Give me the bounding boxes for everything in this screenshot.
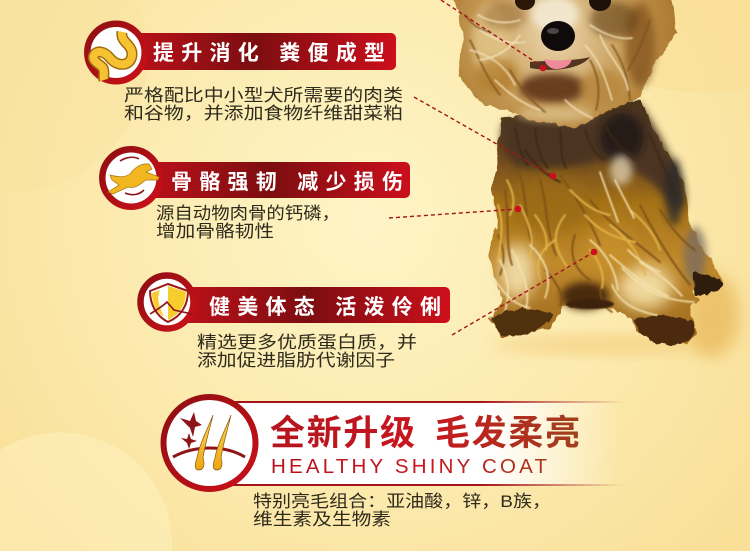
icon: running dog [102, 149, 160, 207]
subheading: HEALTHY SHINY COAT [271, 455, 547, 478]
head fur strands [465, 15, 650, 118]
feature 4: healthy shiny coat [164, 397, 625, 529]
dog head [453, 0, 677, 127]
body text [197, 333, 417, 370]
body text [253, 492, 551, 529]
feature 3: body shape [140, 276, 450, 370]
white band [210, 401, 625, 486]
hind paw [693, 273, 722, 296]
body text: 源自动物肉骨的钙磷， [156, 204, 340, 223]
dark neck fur [501, 104, 685, 209]
banner [112, 33, 396, 70]
body text: 维生素及生物素 [253, 510, 391, 529]
body text: 严格配比中小型犬所需要的肉类 [124, 86, 403, 105]
dog body [488, 100, 722, 345]
heading: 毛发柔亮 [435, 414, 580, 453]
body text: 精选更多优质蛋白质，并 [197, 333, 417, 352]
body text: 和谷物，并添加食物纤维甜菜粕 [124, 104, 403, 123]
body text: 特别亮毛组合：亚油酸，锌，B族， [253, 492, 551, 511]
icon: hair follicles [164, 397, 256, 489]
icon: stomach [87, 24, 145, 81]
eyes [515, 0, 535, 10]
callout lines and dots [389, 0, 597, 335]
chest fur [508, 177, 592, 233]
body text [156, 204, 340, 241]
banner [165, 287, 450, 323]
heading: 骨骼强韧 减少损伤 [171, 171, 403, 194]
fur strands [495, 125, 695, 316]
dog photo [453, 0, 722, 345]
front paw right [634, 316, 693, 345]
front paw left [491, 310, 553, 337]
body text: 增加骨骼韧性 [156, 222, 274, 241]
heading: 全新升级 [270, 414, 415, 453]
head shading [625, 3, 655, 87]
feature 2: bones [102, 149, 410, 241]
icon: shield [140, 276, 194, 328]
nose [541, 21, 575, 51]
body text [124, 86, 403, 123]
body text: 添加促进脂肪代谢因子 [197, 351, 395, 370]
feature 1: digestion [87, 24, 403, 123]
banner [128, 162, 410, 198]
heading: 健美体态 活泼伶俐 [209, 295, 441, 319]
heading [270, 414, 580, 453]
mouth and tongue [530, 57, 590, 70]
heading: 提升消化 粪便成型 [153, 41, 385, 65]
